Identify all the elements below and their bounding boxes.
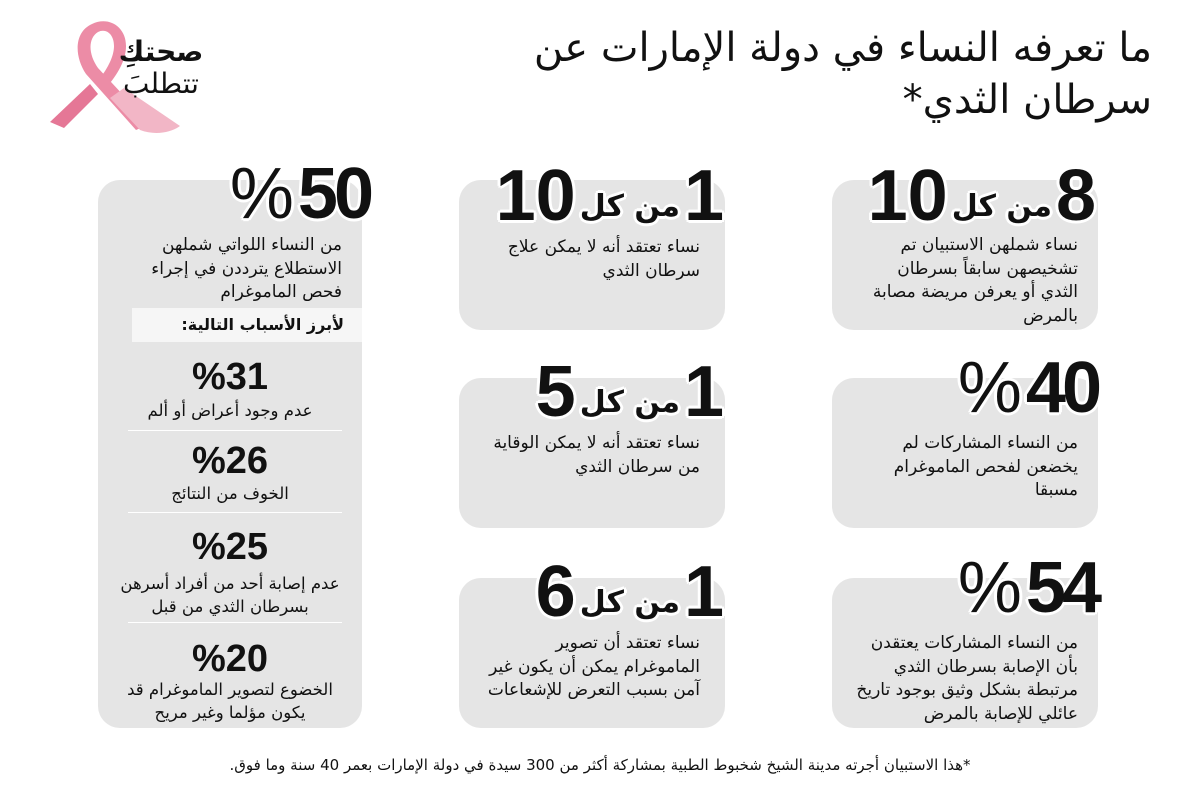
text: 1 of 6: نساء تعتقد أن تصوير الماموغرام يمكن أن يكون غير آمن بسبب التعرض للإشعاعات bbox=[488, 633, 700, 700]
reason 25%: عدم إصابة أحد من أفراد أسرهن بسرطان الثدي من قبل bbox=[120, 574, 340, 616]
reason 31% bbox=[148, 356, 312, 420]
panel: card 1 of 10 bbox=[459, 180, 725, 330]
panel: reasons card bbox=[98, 180, 362, 728]
reason 26%: %26 bbox=[192, 440, 268, 482]
big number: 1 of 10: 1من كل10 bbox=[496, 156, 724, 236]
big number: 1 of 6: 1من كل6 bbox=[536, 552, 724, 632]
panel: card 1 of 5 bbox=[459, 378, 725, 528]
big number: 1 of 5: 1من كل5 bbox=[536, 352, 724, 432]
title: سرطان الثدي* bbox=[903, 77, 1152, 123]
reason 25%: %25 bbox=[192, 526, 268, 568]
reason 26%: الخوف من النتائج bbox=[171, 484, 289, 503]
reason 20%: الخضوع لتصوير الماموغرام قد يكون مؤلما وغير مريح bbox=[127, 680, 333, 722]
big number: 54%: %54 bbox=[958, 548, 1098, 628]
text: 50%: من النساء اللواتي شملهن الاستطلاع يترددن في إجراء فحص الماموغرام bbox=[151, 235, 342, 302]
reason 31%: %31 bbox=[192, 356, 268, 398]
reasons banner bbox=[132, 308, 362, 342]
panel: card 40% bbox=[832, 378, 1098, 528]
big number: 8 of 10: 8من كل10 bbox=[868, 156, 1096, 236]
logo text bbox=[119, 35, 203, 100]
reason 31%: عدم وجود أعراض أو ألم bbox=[148, 401, 312, 420]
logo bbox=[50, 21, 203, 133]
logo text: صحتكِ bbox=[119, 35, 203, 68]
panel: card 1 of 6 bbox=[459, 578, 725, 728]
reasons banner: لأبرز الأسباب التالية: bbox=[181, 315, 344, 334]
reason 25% bbox=[120, 526, 340, 616]
panel: card 54% bbox=[832, 578, 1098, 728]
text: 1 of 10: نساء تعتقد أنه لا يمكن علاج سرطان الثدي bbox=[508, 237, 700, 280]
panel: card 8 of 10 bbox=[832, 180, 1098, 330]
title bbox=[534, 25, 1152, 123]
icon: pink ribbon bbox=[50, 21, 180, 133]
text: 1 of 5: نساء تعتقد أنه لا يمكن الوقاية من سرطان الثدي bbox=[493, 433, 700, 476]
reason 20% bbox=[127, 638, 333, 722]
text: card 1: نساء شملهن الاستبيان تم تشخيصهن سابقاً بسرطان الثدي أو يعرفن مريضة مصابة بالمرض bbox=[873, 235, 1078, 326]
big number: 40%: %40 bbox=[958, 348, 1098, 428]
big number: 50%: %50 bbox=[230, 154, 370, 234]
title: ما تعرفه النساء في دولة الإمارات عن bbox=[534, 25, 1152, 71]
logo text: تتطلبَ bbox=[123, 67, 199, 100]
reason 20%: %20 bbox=[192, 638, 268, 680]
reason 26% bbox=[171, 440, 289, 503]
text: card 54%: من النساء المشاركات يعتقدن بأن الإصابة بسرطان الثدي مرتبطة بشكل وثيق بوجود تاريخ عائلي للإصابة بالمرض bbox=[856, 633, 1078, 724]
text: card 40%: من النساء المشاركات لم يخضعن لفحص الماموغرام مسبقا bbox=[894, 433, 1078, 500]
footnote: *هذا الاستبيان أجرته مدينة الشيخ شخبوط الطبية بمشاركة أكثر من 300 سيدة في دولة الإمارات بعمر 40 سنة وما فوق. bbox=[229, 756, 971, 774]
